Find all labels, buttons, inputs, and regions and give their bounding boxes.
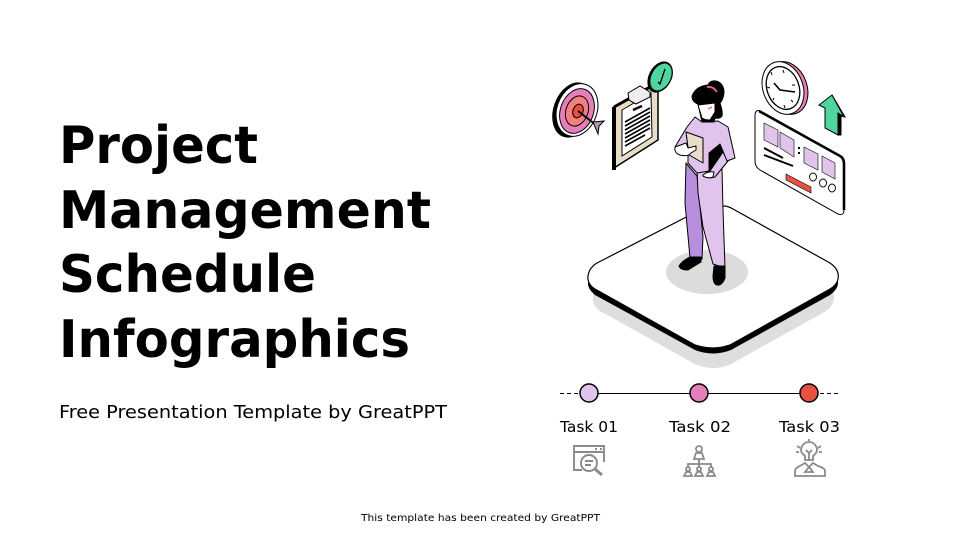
- icon: org chart: [684, 446, 715, 476]
- dashboard button: [786, 174, 811, 193]
- paper lines: [625, 106, 650, 146]
- person: [675, 81, 735, 285]
- task labels: Task 01: [559, 418, 618, 436]
- right hand: [703, 172, 714, 178]
- footer: This template has been created by GreatPPT: [360, 513, 601, 524]
- icon: up arrow: [819, 95, 845, 135]
- forearm: [703, 152, 728, 178]
- icon: target: [546, 77, 605, 143]
- dashboard dots: [810, 173, 836, 192]
- shoes: [679, 257, 701, 270]
- node 2: [690, 384, 708, 402]
- dashboard text lines: [764, 147, 799, 166]
- tablet: [686, 132, 703, 163]
- dashboard cards: [764, 123, 835, 179]
- platform: [588, 206, 838, 368]
- front leg: [697, 168, 725, 268]
- title: Project: [59, 116, 258, 176]
- subtitle: Free Presentation Template by GreatPPT: [59, 402, 448, 423]
- task labels: [559, 418, 840, 436]
- panel: dashboard: [755, 111, 844, 214]
- dart: [578, 111, 596, 125]
- node 3: [800, 384, 818, 402]
- torso dark side: [709, 143, 724, 171]
- hair: [692, 81, 724, 122]
- node 1: [580, 384, 598, 402]
- icon: clock: [755, 56, 815, 120]
- task labels: Task 02: [668, 418, 731, 436]
- left hand: [675, 143, 696, 156]
- icon: window search: [574, 446, 604, 475]
- title: [59, 116, 431, 370]
- mouth detail: [708, 107, 712, 109]
- icon: clipboard: [614, 83, 658, 170]
- floor shadow: [666, 250, 748, 294]
- icon: idea person: [795, 439, 825, 476]
- icon: green check badge: [643, 58, 677, 96]
- back leg: [685, 163, 703, 259]
- clip: [628, 86, 650, 104]
- title: Management: [59, 181, 431, 241]
- timeline: [560, 384, 840, 402]
- title: Schedule: [59, 245, 316, 305]
- hair band: [707, 87, 717, 92]
- shirt: [675, 117, 735, 173]
- face: [698, 103, 715, 120]
- title: Infographics: [59, 310, 410, 370]
- task labels: Task 03: [778, 418, 840, 436]
